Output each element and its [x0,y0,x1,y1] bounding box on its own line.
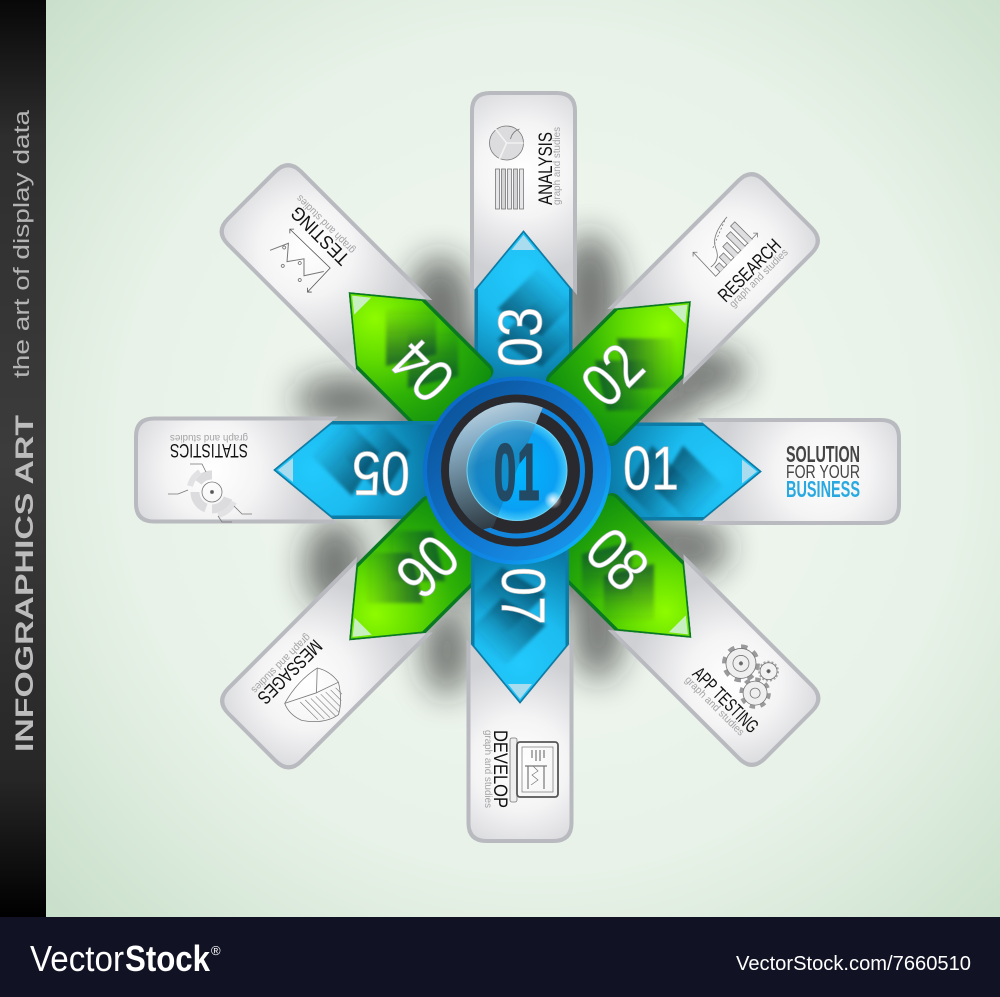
arm 01: solution [567,418,901,530]
icon: pie and bars [490,126,524,209]
heading: app testing: APP TESTING [688,663,762,738]
arm 04: testing [212,153,503,444]
footer logo [30,938,221,979]
caption: app testing: graph and studies [682,674,747,738]
arm 07: develop [462,509,574,843]
icon: line chart [267,227,334,295]
heading: for your: FOR YOUR [786,462,860,482]
arm 02: research [539,165,830,456]
arm 06: messages [210,486,501,777]
heading: research: RESEARCH [714,235,786,307]
heading: statistics: STATISTICS [170,439,248,460]
footer logo: Stock [125,938,211,979]
drop shadows behind arms [295,233,747,696]
arm 05: statistics [134,412,468,524]
icon: growth chart [690,210,760,279]
arm 08: app testing [537,486,828,777]
caption: statistics: graph and studies [170,432,248,444]
number 05: 05 [352,438,410,507]
sidebar [0,0,46,917]
caption: testing: graph and studies [294,192,358,256]
heading: analysis: ANALYSIS [536,132,557,205]
heading: solution: SOLUTION [786,441,860,467]
number 03: 03 [486,307,556,367]
number 04: 04 [378,325,468,415]
heading: testing: TESTING [287,202,354,269]
central badge [423,376,611,564]
arm 03: analysis [470,91,582,425]
number 08: 08 [572,515,662,605]
icon: gears [711,635,789,713]
icon: envelope [280,663,355,738]
heading: develop: DEVELOP [489,730,510,808]
badge number: 01 [494,429,540,517]
icon: radial gauge [168,464,252,522]
caption: analysis: graph and studies [551,127,563,205]
number 02: 02 [568,331,658,421]
number 07: 07 [488,567,557,625]
caption: messages: graph and studies [249,631,313,696]
icon: monitor [510,738,558,802]
footer logo: Vector [30,938,124,979]
number 06: 06 [382,521,472,611]
heading: messages: MESSAGES [253,635,326,708]
footer bar [0,917,1000,997]
caption: research: graph and studies [727,247,791,310]
footer image id: VectorStock.com/7660510 [736,953,971,975]
sidebar tagline: the art of display data [9,109,34,378]
caption: develop: graph and studies [482,730,494,808]
number 01: 01 [623,434,679,504]
glass reflection [449,402,568,530]
heading: business: BUSINESS [786,476,860,502]
footer logo: ® [211,943,221,958]
sidebar title: INFOGRAPHICS ART [11,415,39,752]
